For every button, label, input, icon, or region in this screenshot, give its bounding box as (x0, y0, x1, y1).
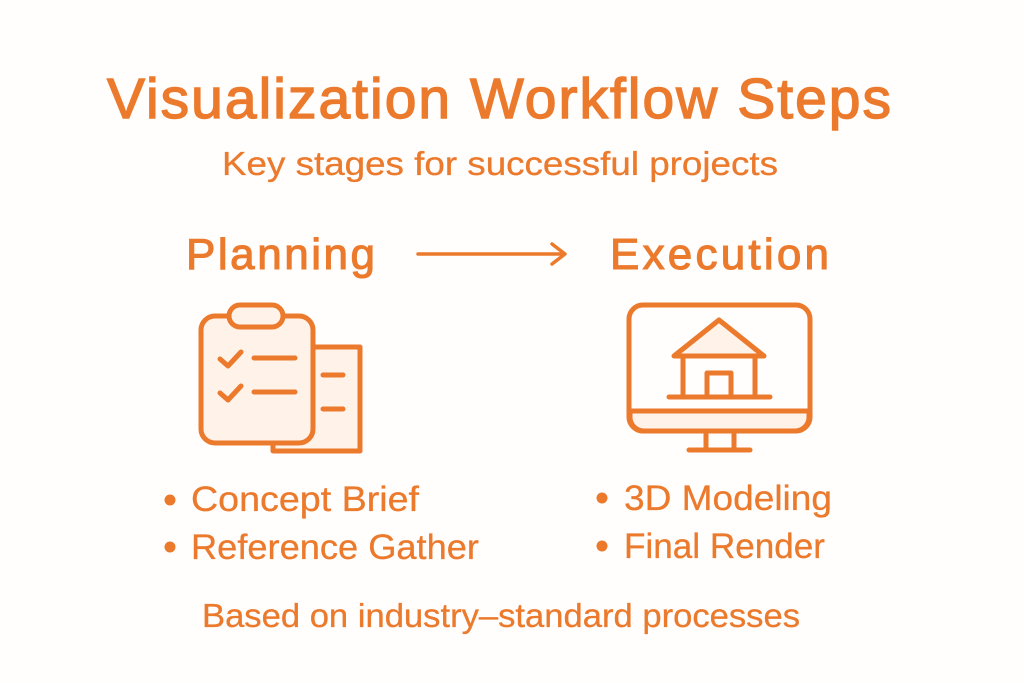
list: planning items: Reference Gather (191, 528, 479, 567)
subtitle: Key stages for successful projects (222, 145, 778, 182)
arrow: planning to execution (418, 244, 565, 264)
list: execution items: Final Render (624, 527, 825, 566)
footer note: Based on industry–standard processes (202, 597, 800, 634)
list: planning items (164, 480, 479, 567)
list: execution items (596, 479, 832, 566)
icon: monitor with house (629, 305, 810, 450)
heading: planning: Planning (186, 230, 375, 279)
heading: execution: Execution (610, 230, 829, 279)
icon: clipboard with checklist (201, 305, 360, 451)
list: execution items: 3D Modeling (624, 479, 832, 518)
list: planning items: Concept Brief (191, 480, 419, 519)
title: Visualization Workflow Steps (107, 67, 891, 131)
